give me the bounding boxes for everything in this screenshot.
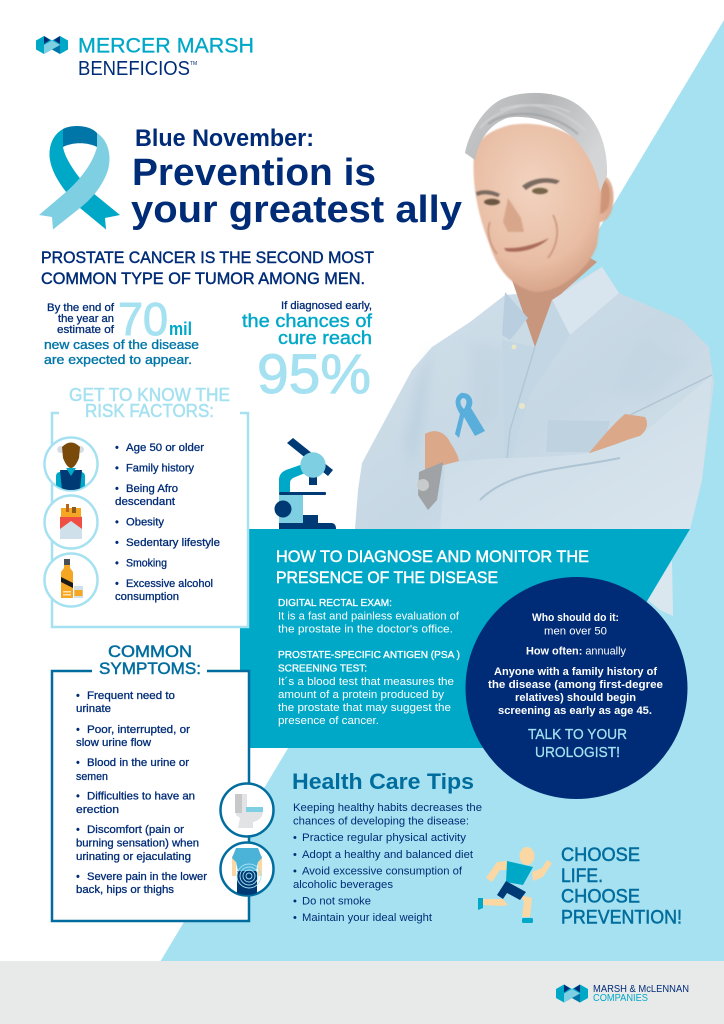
symptoms list: back, hips or thighs — [76, 884, 175, 896]
icon: microscope — [274, 438, 336, 529]
icon: man with lower body pain — [220, 842, 274, 896]
stat: 95% chance of cure: 95% — [257, 342, 371, 405]
symptoms list: Difficulties to have an — [87, 790, 195, 802]
text: PSA screening test: presence of cancer. — [278, 715, 379, 727]
text: PSA screening test — [278, 650, 460, 727]
left hand — [425, 431, 459, 470]
symptoms list: Frequent need to — [87, 690, 175, 702]
icon: toilet — [220, 784, 274, 836]
logo: Mercer Marsh Beneficios: TM — [190, 61, 197, 67]
risk factors list: Excessive alcohol — [126, 578, 213, 590]
symptoms list: urinating or ejaculating — [76, 851, 191, 863]
photo: smiling man with crossed arms — [355, 93, 714, 616]
background: light blue triangle — [160, 20, 724, 962]
logo: Mercer Marsh Beneficios — [36, 34, 254, 80]
risk factors list: • — [115, 578, 119, 590]
symptoms heading: SYMPTOMS: — [99, 659, 201, 678]
risk factors list: • — [115, 442, 119, 454]
panel: who should do it circle: How often: annually — [526, 646, 626, 658]
risk factors heading — [69, 385, 230, 421]
callout: choose life, choose prevention: CHOOSE — [561, 845, 640, 866]
logo: Mercer Marsh Beneficios: MERCER MARSH — [78, 34, 254, 58]
tips text: Avoid excessive consumption of — [302, 866, 463, 878]
risk factors list: Smoking — [126, 558, 167, 570]
risk factors heading: GET TO KNOW THE — [69, 385, 230, 405]
symptoms list — [76, 690, 207, 896]
symptoms list: erection — [76, 804, 119, 816]
tips text: • — [293, 832, 297, 844]
symptoms list: • — [76, 871, 80, 883]
collar — [502, 292, 528, 340]
risk factors list: Obesity — [126, 516, 165, 528]
stat: 70 mil new cases: the year an — [58, 313, 114, 325]
symptoms list: burning sensation) when — [76, 838, 199, 850]
panel: health care tips: Health Care Tips — [292, 769, 474, 794]
shirt — [355, 267, 714, 529]
stat: 70 mil new cases: are expected to appear. — [44, 353, 192, 367]
panel: who should do it circle: UROLOGIST! — [535, 745, 620, 761]
stat: 70 mil new cases — [44, 293, 199, 367]
risk factors list: • — [115, 537, 119, 549]
stat: 70 mil new cases: 70 — [118, 293, 168, 345]
stat: 70 mil new cases: By the end of — [47, 302, 115, 314]
pocket — [546, 420, 610, 452]
panel: common symptoms — [52, 642, 274, 921]
placket line — [500, 347, 535, 529]
head — [474, 124, 614, 292]
icon: running man — [478, 847, 552, 923]
symptoms list: • — [76, 757, 80, 769]
risk factors list: Family history — [126, 462, 194, 474]
tips text: • — [293, 866, 297, 878]
banner heading: PRESENCE OF THE DISEASE — [276, 569, 498, 587]
panel: risk factors — [44, 385, 248, 627]
icon: older man — [44, 438, 98, 492]
tips text: • — [293, 912, 297, 924]
panel: who should do it circle: Anyone with a family history of — [494, 666, 657, 678]
risk factors list: Age 50 or older — [126, 442, 204, 454]
title: Blue November: — [135, 125, 314, 152]
mouth — [504, 238, 549, 252]
heading: prostate cancer statement: PROSTATE CANCER IS THE SECOND MOST — [41, 249, 374, 267]
symptoms list: Severe pain in the lower — [87, 871, 207, 883]
panel: who should do it circle: men over 50 — [544, 626, 607, 638]
callout: choose life, choose prevention: LIFE. — [561, 866, 603, 887]
risk factors list — [115, 442, 220, 603]
ear shading — [600, 180, 610, 214]
stat: 95% chance of cure: If diagnosed early, — [281, 300, 372, 312]
risk factors list: consumption — [115, 591, 179, 603]
callout: choose life, choose prevention: CHOOSE — [561, 886, 640, 908]
title: Prevention is — [132, 152, 376, 194]
banner heading: HOW TO DIAGNOSE AND MONITOR THE — [276, 548, 589, 566]
footer band — [0, 961, 724, 1024]
text: PSA screening test: the prostate that may suggest the — [278, 702, 451, 714]
tips text: Practice regular physical activity — [302, 832, 467, 844]
stat: 95% chance of cure: cure reach — [278, 328, 372, 348]
lapel ribbon — [455, 393, 485, 438]
watch — [418, 462, 443, 510]
eyes — [484, 199, 500, 205]
symptoms list: Discomfort (pain or — [87, 824, 184, 836]
text: PSA screening test: It´s a blood test that measures the — [278, 676, 454, 688]
heading: prostate cancer statement — [41, 249, 374, 288]
stat: 95% chance of cure: the chances of — [242, 311, 373, 331]
risk factors list: • — [115, 462, 119, 474]
symptoms list: semen — [76, 771, 108, 783]
stat: 70 mil new cases: new cases of the disease — [44, 338, 199, 352]
risk factors heading: RISK FACTORS: — [85, 401, 214, 421]
tips text: alcoholic beverages — [293, 879, 394, 891]
symptoms list: • — [76, 790, 80, 802]
logo: Marsh & McLennan Companies — [556, 984, 689, 1004]
symptoms list: • — [76, 824, 80, 836]
risk factors list: descendant — [115, 496, 175, 508]
stat: 95% chance of cure — [242, 300, 373, 405]
risk factors list: • — [115, 516, 119, 528]
risk factors list: Being Afro — [126, 483, 178, 495]
risk factors list: • — [115, 558, 119, 570]
logo: Marsh & McLennan Companies: COMPANIES — [593, 993, 648, 1004]
text: digital rectal exam: the prostate in the doctor's office. — [278, 624, 453, 636]
shirt folds — [405, 340, 690, 470]
panel: who should do it circle: screening as early as age 45. — [498, 705, 652, 717]
symptoms list: urinate — [76, 703, 111, 715]
buttons — [512, 344, 516, 350]
text: digital rectal exam — [278, 598, 460, 636]
panel: who should do it circle: relatives) should begin — [515, 692, 636, 704]
panel: who should do it circle — [466, 577, 688, 799]
callout: choose life, choose prevention: PREVENTION! — [561, 908, 682, 928]
icon: awareness ribbon — [39, 126, 120, 230]
text: PSA screening test: PROSTATE-SPECIFIC ANTIGEN (PSA ) — [278, 650, 460, 661]
tips text — [293, 802, 482, 924]
nose shadow — [503, 198, 524, 232]
panel: who should do it circle: TALK TO YOUR — [528, 727, 627, 743]
title — [131, 125, 462, 231]
symptoms list: Poor, interrupted, or — [87, 724, 190, 736]
callout: choose life, choose prevention — [561, 845, 682, 928]
eyebrows — [476, 190, 500, 197]
symptoms heading: COMMON — [108, 642, 192, 661]
tips text: Maintain your ideal weight — [302, 912, 432, 924]
right hand — [589, 414, 647, 455]
heading: prostate cancer statement: COMMON TYPE OF TUMOR AMONG MEN. — [41, 270, 365, 288]
text: PSA screening test: amount of a protein produced by — [278, 689, 445, 701]
panel: who should do it circle: the disease (among first-degree — [488, 679, 663, 691]
stat: 70 mil new cases: mil — [169, 319, 192, 339]
text: digital rectal exam: DIGITAL RECTAL EXAM: — [278, 598, 392, 609]
risk factors list: Sedentary lifestyle — [126, 537, 220, 549]
logo: Mercer Marsh Beneficios: BENEFICIOS — [78, 58, 190, 80]
tips text: • — [293, 896, 297, 908]
tips text: Adopt a healthy and balanced diet — [302, 849, 473, 861]
sleeve — [440, 375, 712, 529]
icon: whisky bottle — [44, 554, 98, 606]
tips text: • — [293, 849, 297, 861]
symptoms heading — [99, 642, 201, 678]
symptoms list: Blood in the urine or — [87, 757, 189, 769]
symptoms list: • — [76, 690, 80, 702]
stat: 70 mil new cases: estimate of — [57, 324, 115, 336]
risk factors list: • — [115, 483, 119, 495]
symptoms list: slow urine flow — [76, 737, 151, 749]
hair — [465, 93, 607, 192]
tips text: chances of developing the disease: — [293, 816, 469, 828]
panel: health care tips — [292, 769, 482, 924]
panel: how to diagnose banner — [240, 529, 690, 748]
symptoms list: • — [76, 724, 80, 736]
text: digital rectal exam: It is a fast and painless evaluation of — [278, 610, 460, 622]
text: PSA screening test: SCREENING TEST: — [278, 664, 367, 674]
panel: who should do it circle: Who should do it: — [532, 612, 619, 624]
tips text: Do not smoke — [302, 896, 371, 908]
banner heading — [276, 548, 589, 587]
smile creases — [488, 215, 557, 258]
title: your greatest ally — [131, 189, 462, 231]
logo: Marsh & McLennan Companies: MARSH & McLENNAN — [593, 984, 689, 995]
tips text: Keeping healthy habits decreases the — [293, 802, 482, 814]
neck — [505, 240, 597, 347]
icon: cigarette pack — [44, 496, 98, 548]
